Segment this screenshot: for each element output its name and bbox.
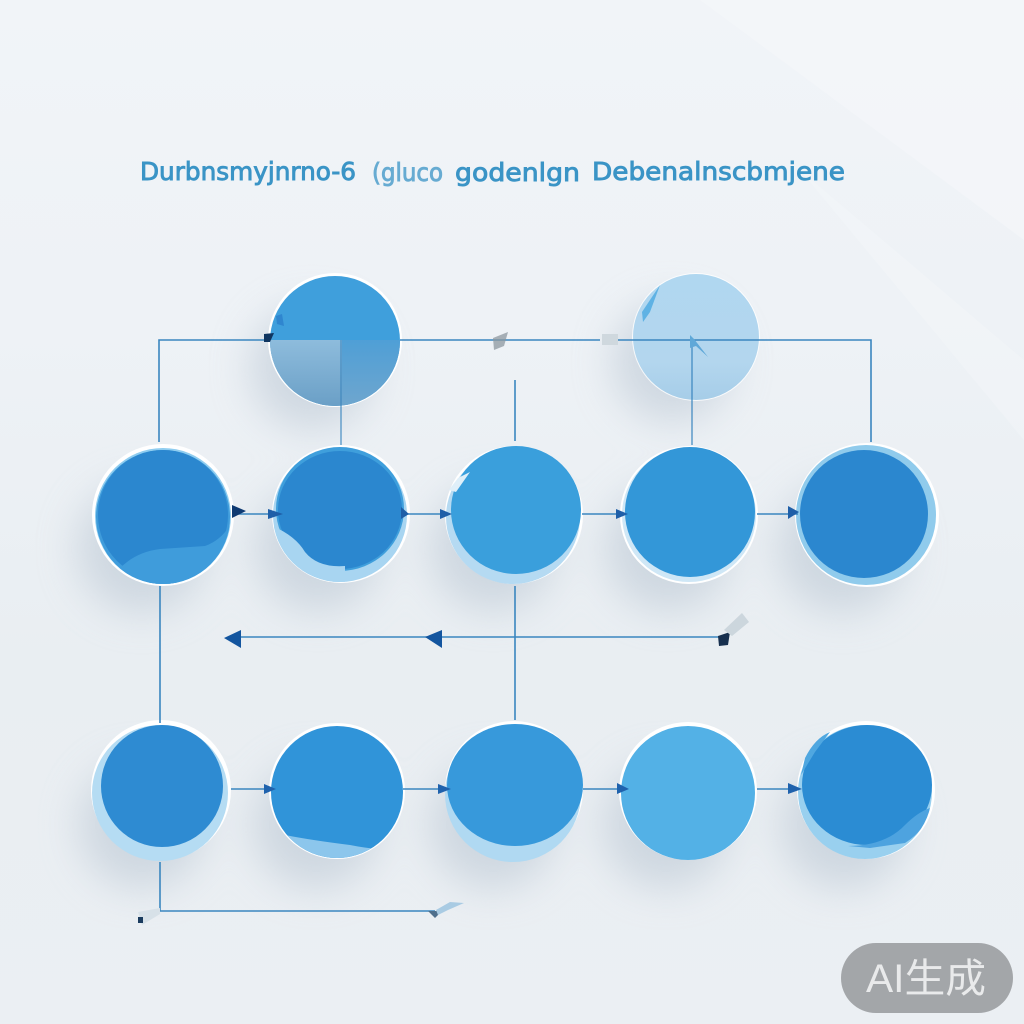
row 2 node 2 [270, 445, 410, 590]
badge: AI generated [841, 943, 1013, 1013]
connector lines [159, 340, 871, 911]
title [140, 157, 845, 187]
title: Durbnsmyjnrno-6 [140, 157, 356, 186]
page [62, 160, 1013, 1013]
row 2 node 3 [445, 446, 583, 584]
row 2 node 5 [795, 443, 939, 587]
infographic canvas [62, 160, 1013, 1013]
row 3 node 5 [797, 721, 935, 859]
title: Debenalnscbmjene [592, 157, 845, 186]
small marker glitches on connectors [138, 332, 749, 925]
title: godenlgn [455, 158, 580, 187]
top node: right [632, 273, 760, 401]
row 3 arrowheads [264, 783, 802, 794]
row 2 arrowheads [232, 505, 799, 519]
top node: left [268, 273, 402, 407]
row 3 node 4 [619, 722, 757, 860]
title: (gluco [372, 158, 443, 187]
left-pointing arrows [224, 630, 442, 648]
row 3 node 3 [445, 721, 583, 862]
row 3 node 1 [91, 720, 231, 861]
row 3 node 2 [269, 723, 405, 862]
badge: AI generated: AI生成 [866, 957, 986, 1001]
row 2 node 4 [620, 446, 758, 584]
row 2 node 1 [92, 444, 236, 590]
soft drop shadows [77, 302, 907, 888]
